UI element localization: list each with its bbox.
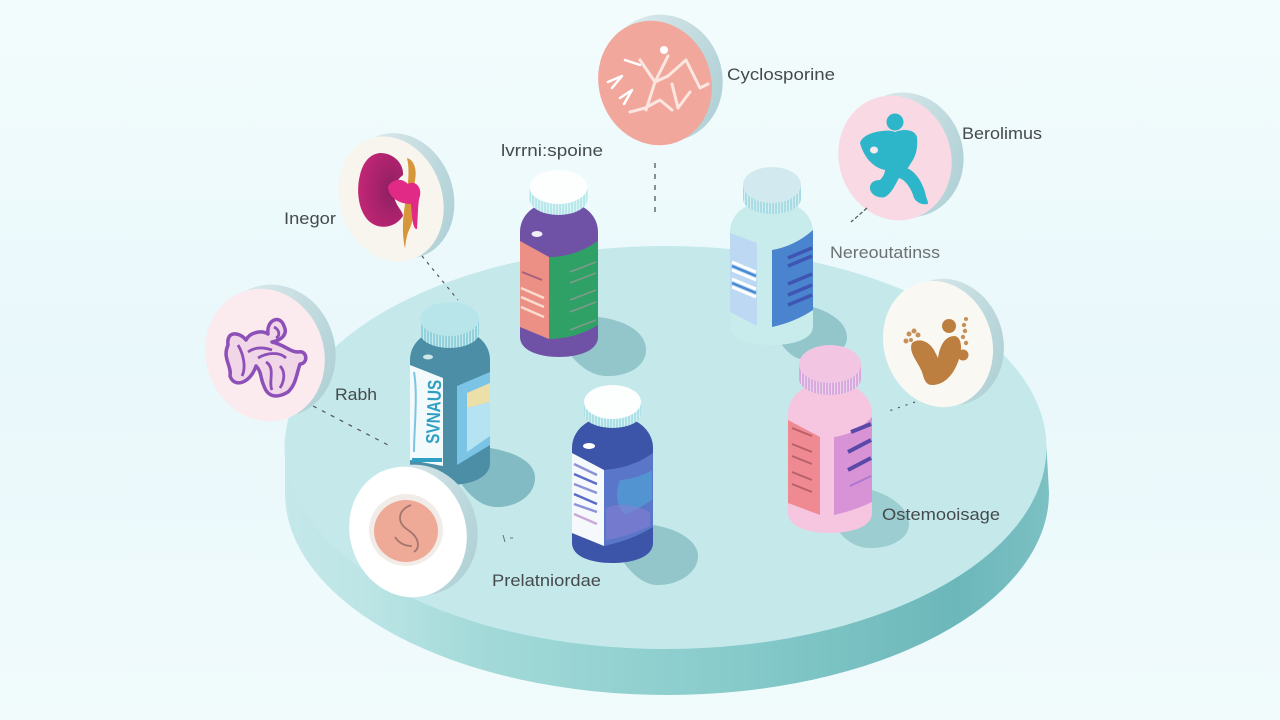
bottle: pink [788, 345, 909, 548]
bottle highlight [532, 231, 542, 237]
dashed connector: cyclosporine [654, 163, 656, 212]
dashed connector: intestine [313, 406, 390, 446]
label: Rabh: Rabh [335, 386, 377, 404]
dashed connector: kidney [422, 256, 458, 300]
label: Cyclosporine: Cyclosporine [727, 66, 835, 84]
bottle: pale blue [730, 167, 847, 360]
platform top surface [284, 246, 1046, 649]
label right [549, 241, 598, 339]
label lines [521, 262, 596, 330]
platform side [285, 447, 1049, 695]
disc: cyclosporine [581, 0, 740, 161]
dashed connector: body [851, 208, 867, 222]
disc: body figure [822, 77, 980, 235]
label: Nrrnspoine: lvrrni:spoine [501, 142, 603, 160]
tick marks [503, 535, 513, 542]
icon: stomach [369, 494, 443, 566]
disc: foot [867, 264, 1020, 422]
bottle label text: SVNAUS [423, 379, 446, 444]
disc: intestine [188, 269, 353, 437]
icon: intestine [226, 320, 306, 396]
dashed connector: foot [886, 402, 915, 412]
bottle: dark blue [572, 385, 698, 585]
platform [284, 246, 1049, 695]
label: Inegor: Inegor [284, 210, 337, 228]
bottle body [520, 205, 598, 357]
disc: kidney [321, 118, 472, 277]
bottle shadow [572, 317, 646, 376]
label: Berolimus: Berolimus [962, 125, 1042, 143]
bottle: purple [520, 170, 646, 376]
bottle: teal [410, 302, 535, 507]
bottle cap [530, 170, 588, 215]
label: Ostemooisage: Ostemooisage [882, 506, 1000, 524]
icon: body figure [860, 114, 928, 204]
label: Nereoutatinss: Nereoutatinss [830, 244, 940, 262]
label left [520, 241, 549, 339]
icon: molecule lines [608, 46, 708, 112]
disc: stomach [332, 449, 495, 613]
label: Prelatniordae: Prelatniordae [492, 572, 601, 590]
icon: feet [904, 317, 968, 385]
icon: kidney [358, 153, 420, 248]
